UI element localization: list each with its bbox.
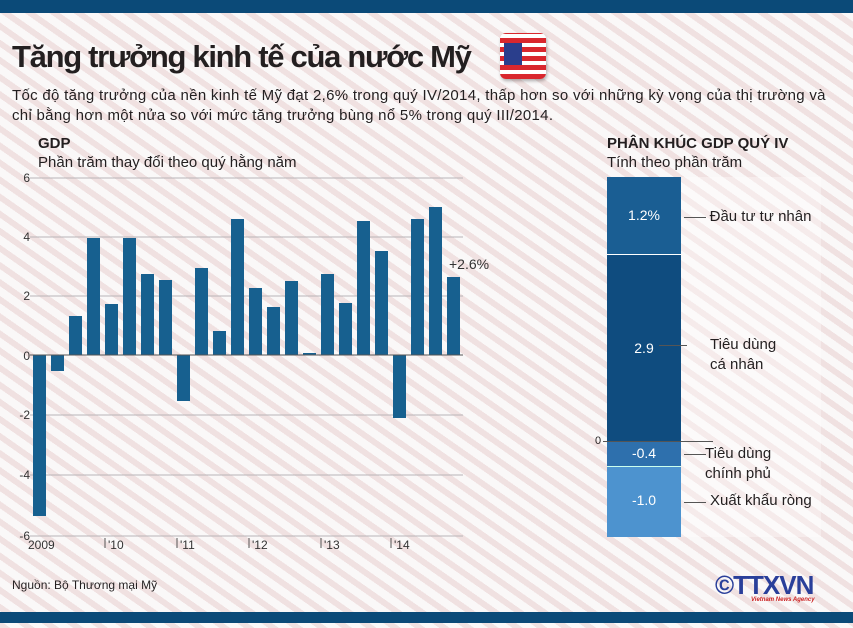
text: 0 — [595, 435, 601, 447]
bar chart: 0 — [23, 349, 30, 363]
labels: Đầu tư tư nhân — [710, 208, 811, 225]
bar chart: '12 — [252, 538, 268, 552]
bar chart: 6 — [23, 171, 30, 185]
bar chart: 2009 — [28, 538, 55, 552]
source: Nguồn: Bộ Thương mại Mỹ — [12, 578, 157, 592]
subtitle: chỉ bằng hơn một nửa so với mức tăng trưởng bùng nổ 5% trong quý III/2014. — [12, 107, 553, 124]
bar chart: '11 — [180, 538, 195, 552]
logo: TTXVN: ©TTXVN — [715, 570, 813, 600]
bar chart: '14 — [394, 538, 410, 552]
chart heading — [38, 135, 297, 171]
bar chart: -2 — [19, 408, 30, 422]
panel: GDP breakdown: cá nhân — [710, 356, 763, 373]
panel: GDP breakdown: Tiêu dùng — [710, 336, 776, 353]
panel: GDP breakdown: Xuất khẩu ròng — [710, 492, 812, 509]
panel: GDP breakdown — [607, 177, 821, 537]
logo: TTXVN: Vietnam News Agency — [751, 597, 815, 603]
stacked column: 1.2% — [628, 207, 660, 223]
bar chart: -6 — [19, 529, 30, 543]
right panel heading: Tính theo phần trăm — [607, 154, 742, 171]
bar chart: -4 — [19, 468, 30, 482]
stacked column: 2.9 — [634, 340, 654, 356]
subtitle — [12, 87, 826, 124]
chart heading: GDP — [38, 135, 71, 152]
bottom bar — [0, 612, 853, 623]
right panel heading: PHÂN KHÚC GDP QUÝ IV — [607, 135, 788, 152]
stacked column: -0.4 — [632, 445, 656, 461]
bar chart: 4 — [23, 230, 30, 244]
subtitle: Tốc độ tăng trưởng của nền kinh tế Mỹ đạt 2,6% trong quý IV/2014, thấp hơn so với những kỳ vọng của thị trường và — [12, 87, 826, 104]
title: Tăng trưởng kinh tế của nước Mỹ — [12, 39, 471, 74]
bar chart: +2.6% — [449, 256, 489, 272]
icon: flag cube — [500, 33, 546, 79]
bar chart: '13 — [324, 538, 340, 552]
right panel heading — [607, 134, 788, 171]
bar chart: '10 — [108, 538, 124, 552]
panel: GDP breakdown: chính phủ — [705, 465, 771, 482]
panel: GDP breakdown: Tiêu dùng — [705, 445, 771, 462]
bar chart — [19, 171, 489, 552]
stacked column: -1.0 — [632, 492, 656, 508]
bar chart: 2 — [23, 289, 30, 303]
top bar — [0, 0, 853, 13]
stacked column — [607, 177, 681, 537]
chart heading: Phần trăm thay đổi theo quý hằng năm — [38, 154, 297, 171]
